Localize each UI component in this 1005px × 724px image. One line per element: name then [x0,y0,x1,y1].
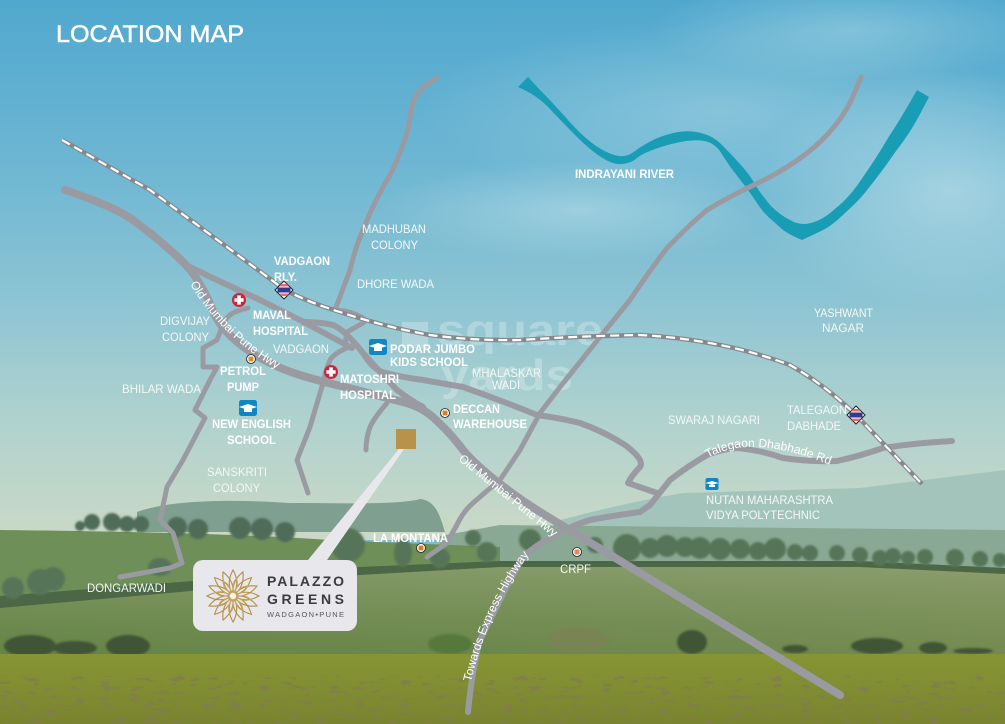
icon: petrol pump marker [246,354,256,364]
icon: Talegaon railway station [847,406,865,424]
place labels: SWARAJ NAGARI [668,413,760,427]
place labels: VIDYA POLYTECHNIC [706,508,820,522]
road label: Towards Express Highway: Towards Express Highway [463,551,528,680]
place labels: CRPF [560,562,591,576]
road: branch past Maval Hospital [190,267,352,348]
place labels: BHILAR WADA [122,382,201,396]
road: short spur to site [366,403,387,450]
road label: Old Mumbai Pune Hwy south: Old Mumbai Pune Hwy [460,455,558,536]
place labels: HOSPITAL [340,388,396,402]
place labels: WADI [492,378,520,392]
icon: Nutan polytechnic [706,478,718,490]
watermark [402,306,603,400]
place labels: SANSKRITI [207,465,267,479]
icon: Maval hospital [232,293,246,307]
road label: Old Mumbai Pune Hwy north: Old Mumbai Pune Hwy [192,282,280,369]
watermark: square [437,306,603,355]
road: long diagonal north-east [427,77,861,557]
place labels: SCHOOL [227,433,276,447]
project site marker [396,429,416,449]
road: old Mumbai Pune highway [65,190,840,695]
place labels: KIDS SCHOOL [390,355,468,369]
watermark: yards [441,351,573,400]
icon: New English school [239,400,257,416]
place labels: DIGVIJAY [160,314,210,328]
icon: Podar Jumbo school [369,339,387,355]
place labels: HOSPITAL [253,324,308,338]
place labels: RLY. [274,270,297,284]
place labels: DHORE WADA [357,277,434,291]
river: Indrayani [518,77,929,240]
place labels: MADHUBAN [362,222,426,236]
railway line [62,140,922,484]
place labels: DECCAN [453,402,500,416]
place labels: NUTAN MAHARASHTRA [706,493,833,507]
place labels: COLONY [162,330,209,344]
callout: Palazzo Greens logo card: GREENS [267,591,344,607]
background landscape [0,470,1005,724]
callout: Palazzo Greens logo card: WADGAON•PUNE [267,610,344,619]
place labels: DABHADE [787,419,841,433]
place labels: NEW ENGLISH [212,417,291,431]
road: Talegaon Dhabhade and express highway [468,441,952,712]
place labels: PODAR JUMBO [390,342,475,356]
place labels: YASHWANT [814,306,874,320]
road: north through Madhuban [335,78,437,345]
callout: Palazzo Greens logo card [193,560,357,631]
callout: Palazzo Greens logo card: PALAZZO [267,573,344,589]
road: east through Mhalaskar Wadi [363,353,657,493]
place labels: MHALASKAR [472,366,541,380]
road: west via Dongarwadi [120,308,248,577]
place labels: PUMP [227,380,259,394]
callout pointer [308,449,404,560]
place labels: INDRAYANI RIVER [575,167,674,181]
road: south past Matoshri [297,346,352,493]
place labels: VADGAON [274,254,330,268]
place labels: VADGAON [273,342,329,356]
place labels: COLONY [213,481,260,495]
icon: gold flower logo [207,570,259,622]
title: LOCATION MAP [56,21,244,48]
place labels: NAGAR [822,321,864,335]
icon: Deccan warehouse marker [440,408,450,418]
background sky [0,0,1005,540]
icon: La Montana marker [416,544,426,552]
road: central link [303,322,423,407]
icon: Matoshri hospital [324,365,338,379]
place labels: MATOSHRI [340,372,399,386]
place labels: LA MONTANA [373,531,448,545]
place labels: WAREHOUSE [453,417,527,431]
place labels: TALEGAON [787,403,847,417]
place labels: MAVAL [253,308,291,322]
place labels [87,167,874,595]
place labels: DONGARWADI [87,581,166,595]
icon: CRPF marker [572,548,582,556]
road label: Talegaon Dhabhade Rd: Talegaon Dhabhade Rd [704,438,832,464]
place labels: PETROL [220,364,266,378]
icon: Vadgaon railway station [275,281,293,299]
road network [65,77,952,712]
place labels: COLONY [371,238,418,252]
